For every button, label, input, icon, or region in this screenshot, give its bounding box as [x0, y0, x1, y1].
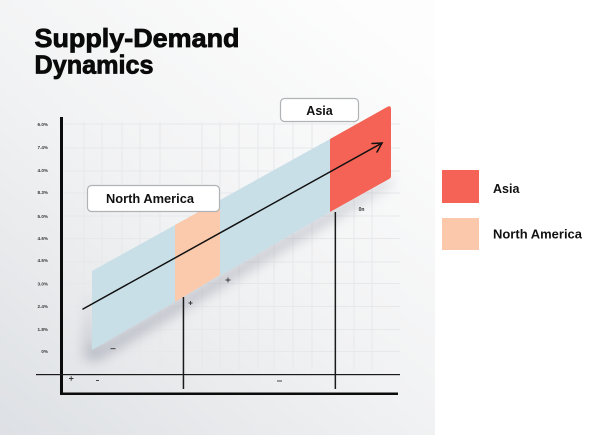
band segment: North America: [175, 200, 220, 302]
baseline: [36, 374, 400, 375]
y axis labels: 3.0%: [38, 282, 48, 286]
legend: [442, 170, 583, 250]
background panel: [0, 0, 435, 435]
y axis: [60, 117, 63, 395]
y axis labels: 6.0%: [38, 122, 48, 127]
small label: 0n: 0n: [359, 207, 364, 213]
marker line: North America: [183, 297, 184, 389]
y axis labels: 4.6%: [38, 236, 48, 241]
y axis labels: 5.0%: [38, 214, 48, 219]
gridlines: [64, 122, 400, 370]
legend swatch: Asia: [442, 170, 479, 203]
legend swatch: North America: [442, 218, 479, 250]
y axis labels: [38, 122, 48, 354]
title: Dynamics: [34, 50, 154, 80]
callout: Asia: [280, 98, 358, 122]
y axis labels: 2.4%: [38, 304, 48, 309]
band segment: Asia: [330, 106, 391, 212]
legend label: North America: North America: [493, 228, 583, 242]
y axis labels: 7.4%: [38, 145, 48, 150]
title: [34, 23, 240, 80]
band segment: base: [92, 139, 330, 350]
y axis labels: 0%: [41, 349, 48, 354]
band shadow: [84, 178, 391, 361]
callout: Asia: Asia: [306, 104, 334, 118]
trend arrow: [83, 143, 382, 309]
legend label: Asia: Asia: [493, 182, 520, 196]
marker line: Asia: [335, 212, 336, 389]
chart band: [92, 106, 391, 350]
callout: North America: North America: [106, 192, 195, 206]
y axis labels: 4.5%: [38, 258, 48, 263]
y axis labels: 8.3%: [38, 190, 48, 195]
y axis labels: 1.8%: [38, 327, 48, 332]
small markers: [69, 278, 282, 381]
title: Supply-Demand: [34, 23, 240, 53]
x axis: [60, 392, 398, 395]
y axis labels: 4.0%: [38, 168, 48, 173]
callout: North America: [88, 186, 220, 212]
